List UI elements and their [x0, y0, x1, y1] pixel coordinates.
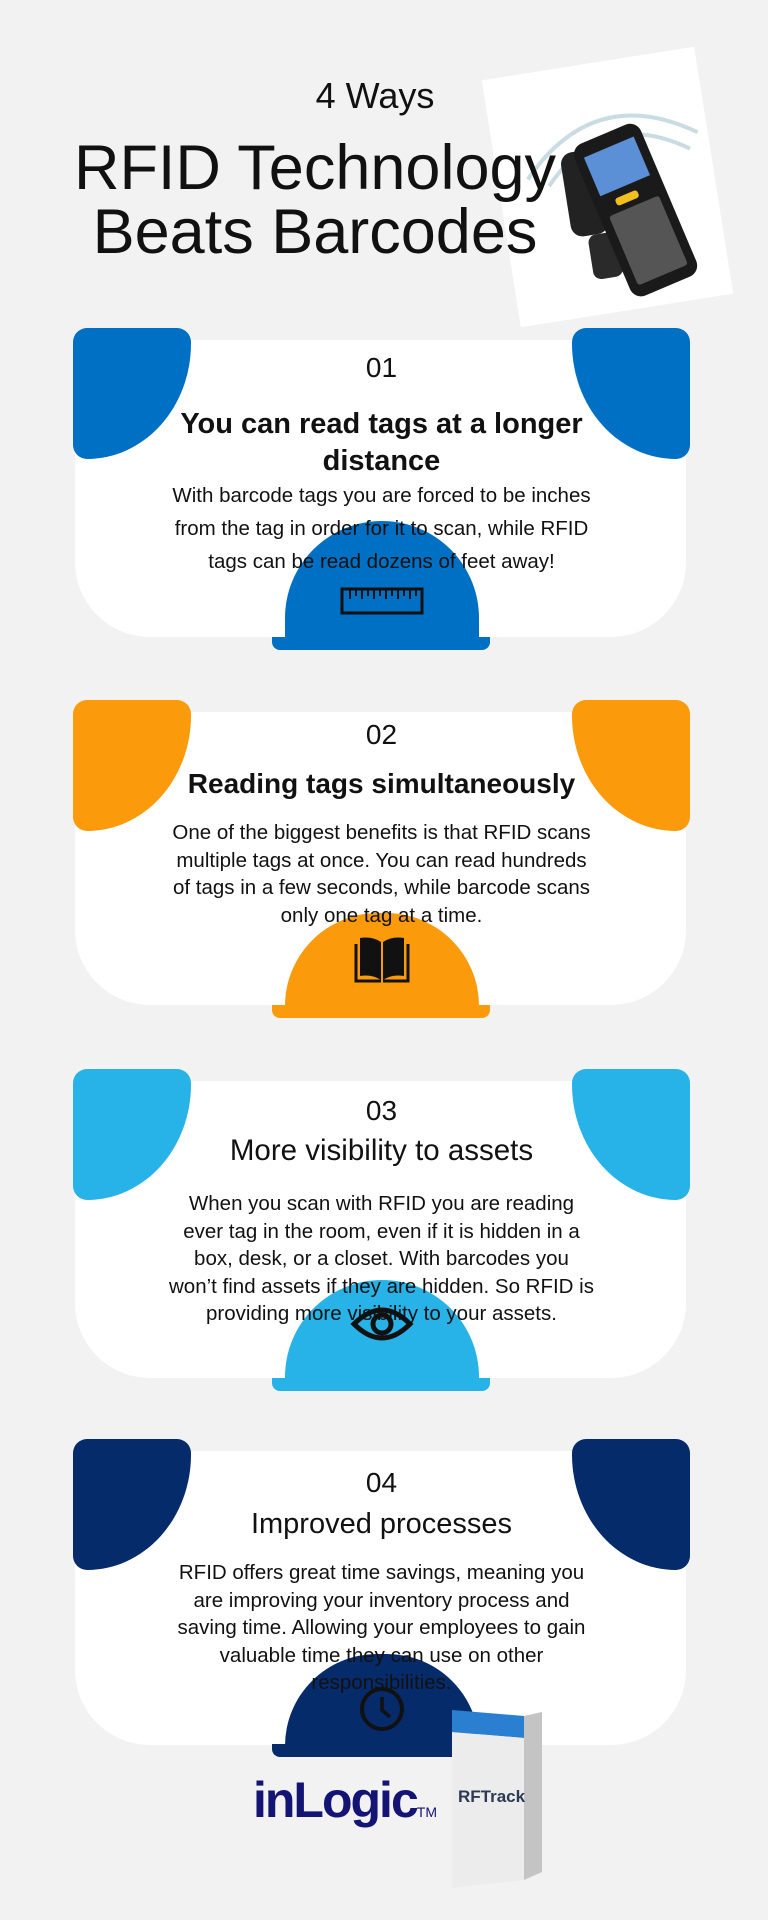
text block: of tags in a few seconds, while barcode scans: [173, 876, 590, 899]
text block: [178, 1561, 585, 1694]
text block: responsibilities.: [311, 1671, 452, 1694]
icon: clock: [360, 1687, 404, 1731]
text block: ever tag in the room, even if it is hidden in a: [183, 1220, 580, 1242]
image: RFTrack box: [452, 1710, 542, 1880]
number 03: 03: [366, 1095, 397, 1126]
logo: inLogic: inLogicTM: [253, 1772, 437, 1828]
heading: Improved processes: [251, 1508, 512, 1540]
main title: Beats Barcodes: [93, 197, 537, 267]
text block: from the tag in order for it to scan, while RFID: [175, 517, 588, 540]
text block: saving time. Allowing your employees to gain: [178, 1616, 585, 1639]
text block: multiple tags at once. You can read hundreds: [176, 848, 587, 872]
heading: [180, 408, 583, 477]
number 02: 02: [366, 719, 397, 750]
text block: With barcode tags you are forced to be inches: [172, 484, 591, 507]
text block: [169, 1192, 594, 1325]
number 04: 04: [366, 1467, 397, 1498]
text block: are improving your inventory process and: [193, 1588, 570, 1612]
image: RFTrack box: RFTrack: [458, 1787, 526, 1806]
header title: [74, 75, 556, 267]
subtitle: 4 Ways: [316, 75, 434, 116]
panel: card 02: [73, 700, 690, 1018]
heading: Reading tags simultaneously: [188, 768, 575, 799]
text block: One of the biggest benefits is that RFID scans: [172, 821, 591, 844]
panel: card 03: [73, 1069, 690, 1391]
text block: only one tag at a time.: [281, 904, 482, 926]
text block: valuable time they can use on other: [220, 1644, 543, 1666]
heading: distance: [323, 445, 440, 477]
panel: card 01: [73, 328, 690, 650]
text block: box, desk, or a closet. With barcodes you: [194, 1247, 569, 1270]
icon: ruler: [340, 588, 424, 614]
main title: [74, 133, 556, 267]
number 01: 01: [366, 352, 397, 383]
text block: [172, 484, 591, 573]
text block: RFID offers great time savings, meaning you: [179, 1561, 584, 1584]
text block: providing more visibility to your assets.: [206, 1302, 557, 1325]
heading: You can read tags at a longer: [180, 408, 583, 440]
heading: More visibility to assets: [230, 1134, 533, 1167]
text block: [172, 821, 591, 926]
text block: won’t find assets if they are hidden. So RFID is: [169, 1274, 594, 1298]
panel: card 04: [73, 1439, 690, 1757]
icon: eye: [350, 1308, 414, 1340]
main title: RFID Technology: [74, 133, 556, 203]
icon: book: [354, 938, 410, 982]
image: RFID scanner: [482, 47, 733, 327]
text block: When you scan with RFID you are reading: [189, 1192, 574, 1215]
text block: tags can be read dozens of feet away!: [208, 550, 555, 573]
